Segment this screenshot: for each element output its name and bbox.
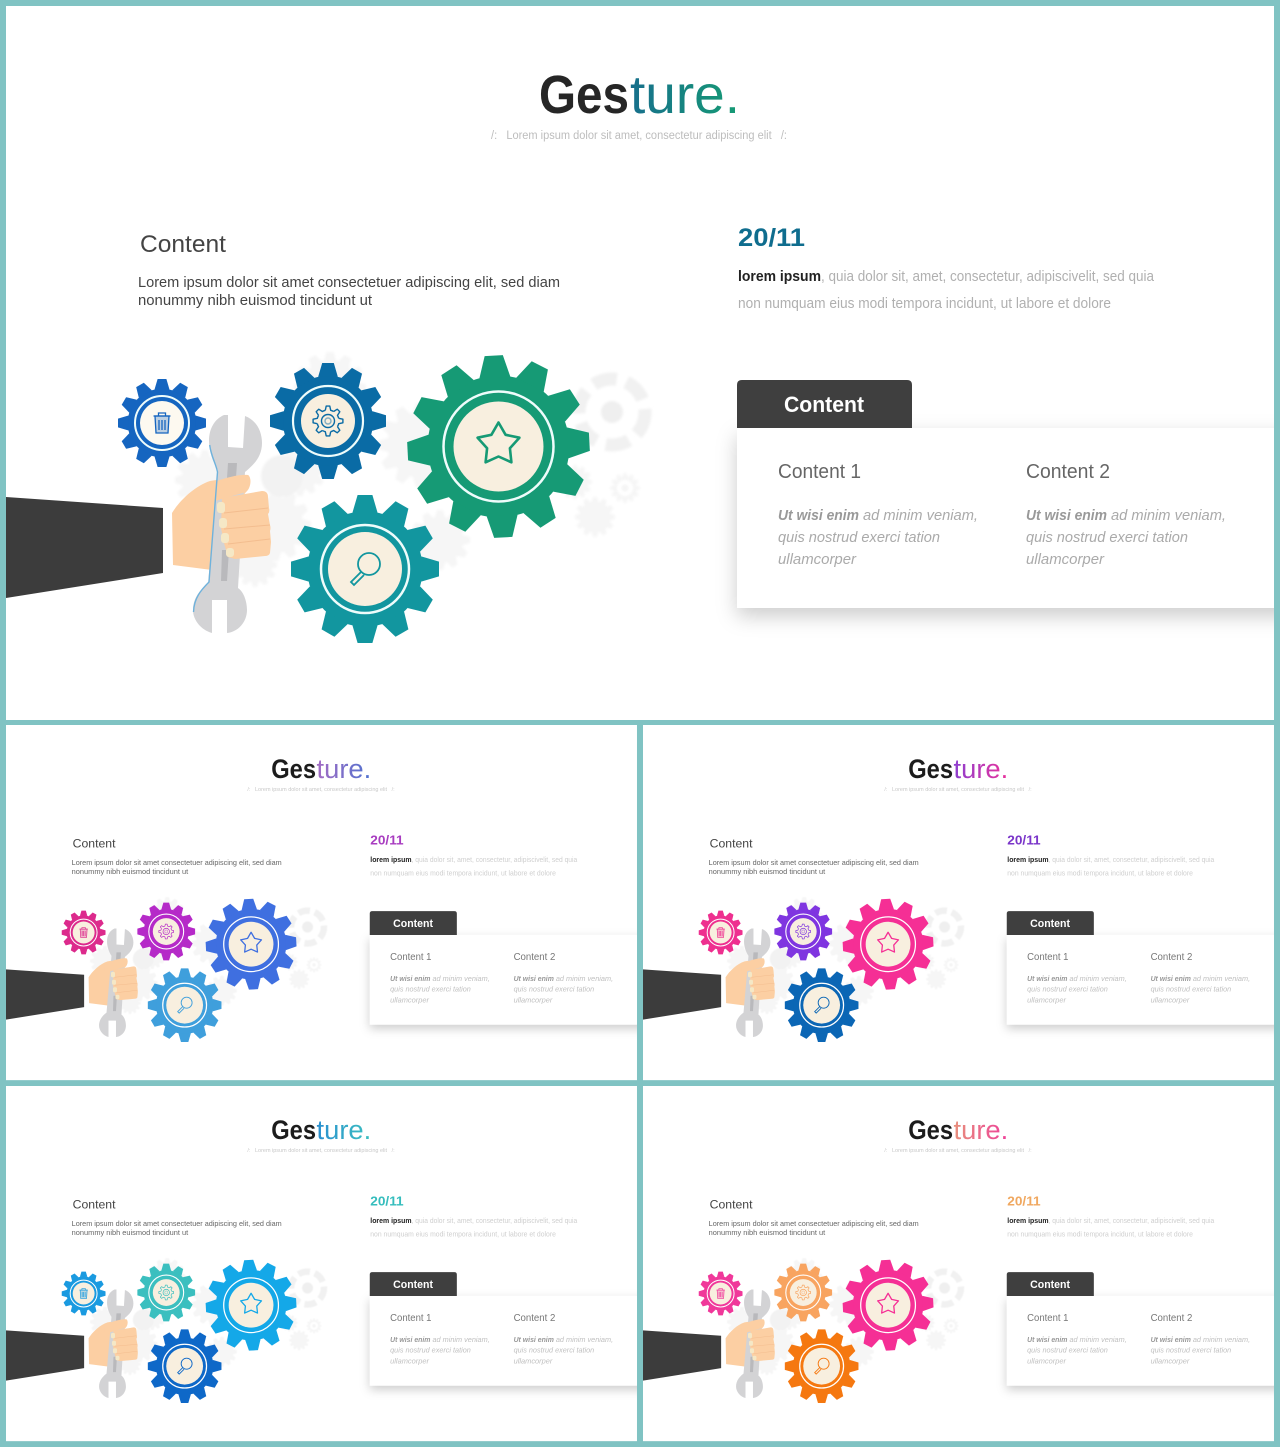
hand holding wrench: [6, 929, 138, 1037]
column 1: ullamcorper: [390, 1357, 429, 1366]
tab: Content: [1030, 918, 1070, 930]
column 2: ad minim veniam,: [556, 1335, 613, 1344]
tab: [370, 911, 457, 935]
background gears: [175, 352, 645, 587]
panel: small pink slide: [643, 725, 1280, 1080]
column 2: Content 2: [1026, 461, 1110, 483]
right text block: lorem ipsum: [738, 269, 821, 285]
column 2: quis nostrud exerci tation: [1151, 1346, 1231, 1355]
left text block: Lorem ipsum dolor sit amet consectetuer adipiscing elit, sed diam: [709, 1219, 919, 1228]
column 1: ullamcorper: [390, 996, 429, 1005]
column 2: ullamcorper: [1151, 996, 1190, 1005]
column 2: Ut wisi enim: [1151, 1335, 1191, 1344]
right text block: [370, 1216, 577, 1238]
right text block: , quia dolor sit, amet, consectetur, adipiscivelit, sed quia: [412, 1216, 577, 1225]
gear: magnifier icon: [785, 1329, 858, 1403]
right text block: non numquam eius modi tempora incidunt, ut labore et dolore: [370, 1229, 556, 1238]
title: [908, 1115, 1008, 1145]
left text block: Lorem ipsum dolor sit amet consectetuer adipiscing elit, sed diam: [72, 1219, 282, 1228]
column 1: [1027, 952, 1127, 1005]
title: [540, 75, 735, 114]
column 2: [514, 952, 613, 1005]
column 2: quis nostrud exerci tation: [1026, 529, 1188, 546]
gear: star icon: [403, 351, 594, 542]
gear: trash icon: [118, 379, 206, 467]
title: [271, 1115, 371, 1145]
date: 20/11: [370, 833, 404, 847]
column 2: Content 2: [1151, 952, 1193, 963]
column 2: Ut wisi enim: [1151, 974, 1191, 983]
gear: magnifier icon: [148, 1329, 221, 1403]
column 2: ad minim veniam,: [556, 974, 613, 983]
subtitle: /: Lorem ipsum dolor sit amet, consectetur adipiscing elit /:: [247, 1148, 395, 1154]
column 2: ullamcorper: [1026, 551, 1105, 568]
gear: settings icon: [137, 1264, 195, 1321]
column 2: quis nostrud exerci tation: [514, 985, 594, 994]
column 1: ad minim veniam,: [863, 507, 978, 524]
right text block: [738, 269, 1155, 312]
gear: magnifier icon: [291, 495, 439, 643]
background gears: [90, 1258, 324, 1375]
left heading: Content: [710, 836, 753, 850]
gear: trash icon: [62, 911, 106, 954]
title: Ges: [908, 1115, 953, 1145]
right text block: , quia dolor sit, amet, consectetur, adipiscivelit, sed quia: [1049, 1216, 1214, 1225]
right text block: lorem ipsum: [370, 855, 412, 864]
tab: Content: [393, 918, 433, 930]
right text block: , quia dolor sit, amet, consectetur, adipiscivelit, sed quia: [821, 269, 1155, 285]
column 2: Ut wisi enim: [514, 974, 554, 983]
right text block: [1007, 855, 1214, 877]
column 1: ullamcorper: [1027, 996, 1066, 1005]
hand holding wrench: [643, 929, 775, 1037]
subtitle: /: Lorem ipsum dolor sit amet, consectetur adipiscing elit /:: [247, 787, 395, 793]
column 2: ad minim veniam,: [1111, 507, 1226, 524]
column 2: ullamcorper: [514, 996, 553, 1005]
left heading: Content: [73, 836, 116, 850]
panel: small blue slide: [6, 1086, 658, 1441]
left text block: nonummy nibh euismod tincidunt ut: [709, 867, 826, 876]
gear: star icon: [840, 897, 936, 992]
column 2: ullamcorper: [514, 1357, 553, 1366]
date: 20/11: [1007, 833, 1041, 847]
subtitle: /: Lorem ipsum dolor sit amet, consectetur adipiscing elit /:: [884, 1148, 1032, 1154]
column 1: Ut wisi enim: [778, 507, 859, 524]
column 2: [1026, 461, 1226, 568]
card: [370, 911, 658, 1025]
gear: settings icon: [774, 903, 832, 960]
column 1: Ut wisi enim: [390, 1335, 431, 1344]
left text block: [709, 860, 918, 876]
column 2: [514, 1313, 613, 1366]
column 1: ad minim veniam,: [432, 1335, 490, 1344]
card: [1007, 1272, 1280, 1386]
column 1: ad minim veniam,: [432, 974, 490, 983]
column 1: [1027, 1313, 1127, 1366]
background gears: [727, 1258, 961, 1375]
hand holding wrench: [6, 1290, 138, 1398]
date: 20/11: [370, 1194, 404, 1208]
date: 20/11: [738, 224, 805, 252]
left heading: Content: [140, 231, 226, 258]
column 1: Ut wisi enim: [1027, 974, 1068, 983]
tab: Content: [1030, 1279, 1070, 1291]
left text block: nonummy nibh euismod tincidunt ut: [72, 867, 189, 876]
right text block: [1007, 1216, 1214, 1238]
column 1: [390, 952, 490, 1005]
title: Ges: [908, 754, 953, 784]
column 1: Content 1: [390, 1313, 432, 1324]
left heading: Content: [710, 1197, 753, 1211]
title: [909, 759, 1006, 778]
left text block: nonummy nibh euismod tincidunt ut: [72, 1228, 189, 1237]
column 1: ad minim veniam,: [1069, 1335, 1127, 1344]
gear: magnifier icon: [148, 968, 221, 1042]
panel: small purple slide: [6, 725, 658, 1080]
gear: trash icon: [699, 911, 743, 954]
left text block: [72, 1219, 282, 1237]
background gears: [90, 897, 324, 1014]
left text block: [709, 1219, 919, 1237]
column 2: ad minim veniam,: [1193, 1335, 1250, 1344]
title: ture.: [630, 65, 740, 125]
column 2: Ut wisi enim: [514, 1335, 554, 1344]
tab: [370, 1272, 457, 1296]
gear: settings icon: [137, 903, 195, 960]
column 2: Content 2: [514, 1313, 556, 1324]
hand holding wrench: [643, 1290, 775, 1398]
gear: settings icon: [270, 363, 386, 479]
gear: magnifier icon: [785, 968, 858, 1042]
wrench edge highlight: [194, 445, 218, 612]
tab: Content: [784, 392, 865, 417]
gear: settings icon: [774, 1264, 832, 1321]
column 2: Ut wisi enim: [1026, 507, 1107, 524]
column 1: Content 1: [1027, 1313, 1069, 1324]
column 2: quis nostrud exerci tation: [514, 1346, 594, 1355]
left text block: [138, 274, 560, 309]
column 2: Content 2: [514, 952, 556, 963]
column 1: Content 1: [778, 461, 861, 483]
left text block: nonummy nibh euismod tincidunt ut: [709, 1228, 826, 1237]
gear: star icon: [203, 897, 299, 992]
left text block: Lorem ipsum dolor sit amet consectetuer adipiscing elit, sed diam: [138, 274, 560, 291]
column 1: Content 1: [1027, 952, 1069, 963]
column 1: [778, 461, 978, 568]
gear: trash icon: [699, 1272, 743, 1315]
title: ture.: [954, 754, 1008, 784]
title: [272, 759, 369, 778]
column 1: Content 1: [390, 952, 432, 963]
column 1: ad minim veniam,: [1069, 974, 1127, 983]
column 2: ullamcorper: [1151, 1357, 1190, 1366]
background gears: [727, 897, 961, 1014]
left text block: Lorem ipsum dolor sit amet consectetuer adipiscing elit, sed diam: [72, 858, 282, 867]
right text block: [370, 855, 577, 877]
tab: [1007, 911, 1094, 935]
card: [1007, 911, 1280, 1025]
right text block: , quia dolor sit, amet, consectetur, adipiscivelit, sed quia: [1049, 855, 1214, 864]
title: Ges: [271, 1115, 316, 1145]
panel: small orange slide: [643, 1086, 1280, 1441]
gear: trash icon: [62, 1272, 106, 1315]
column 1: Ut wisi enim: [1027, 1335, 1068, 1344]
column 1: quis nostrud exerci tation: [390, 1346, 471, 1355]
title: ture.: [317, 754, 371, 784]
left heading: Content: [73, 1197, 116, 1211]
right text block: , quia dolor sit, amet, consectetur, adipiscivelit, sed quia: [412, 855, 577, 864]
tab: [1007, 1272, 1094, 1296]
gear: star icon: [203, 1258, 299, 1353]
title: Ges: [539, 65, 629, 125]
column 1: Ut wisi enim: [390, 974, 431, 983]
subtitle: /: Lorem ipsum dolor sit amet, consectetur adipiscing elit /:: [884, 787, 1032, 793]
gear: star icon: [840, 1258, 936, 1353]
column 1: [390, 1313, 490, 1366]
column 2: quis nostrud exerci tation: [1151, 985, 1231, 994]
column 1: quis nostrud exerci tation: [778, 529, 940, 546]
date: 20/11: [1007, 1194, 1041, 1208]
right text block: non numquam eius modi tempora incidunt, ut labore et dolore: [370, 868, 556, 877]
title: ture.: [954, 1115, 1008, 1145]
column 2: [1151, 1313, 1250, 1366]
column 1: ullamcorper: [1027, 1357, 1066, 1366]
right text block: lorem ipsum: [370, 1216, 412, 1225]
panel: large green slide: [6, 6, 1280, 720]
right text block: lorem ipsum: [1007, 855, 1049, 864]
column 2: ad minim veniam,: [1193, 974, 1250, 983]
right text block: non numquam eius modi tempora incidunt, ut labore et dolore: [1007, 1229, 1193, 1238]
tab: Content: [393, 1279, 433, 1291]
column 1: quis nostrud exerci tation: [1027, 985, 1108, 994]
right text block: lorem ipsum: [1007, 1216, 1049, 1225]
title: Ges: [271, 754, 316, 784]
column 1: ullamcorper: [778, 551, 857, 568]
column 2: [1151, 952, 1250, 1005]
title: ture.: [317, 1115, 371, 1145]
card: [370, 1272, 658, 1386]
left text block: [72, 860, 282, 876]
right text block: non numquam eius modi tempora incidunt, ut labore et dolore: [1007, 868, 1193, 877]
card: [737, 380, 1280, 608]
tab: [737, 380, 912, 428]
column 1: quis nostrud exerci tation: [390, 985, 471, 994]
right text block: non numquam eius modi tempora incidunt, ut labore et dolore: [738, 296, 1111, 312]
column 1: quis nostrud exerci tation: [1027, 1346, 1108, 1355]
left text block: nonummy nibh euismod tincidunt ut: [138, 292, 373, 309]
subtitle: /: Lorem ipsum dolor sit amet, consectetur adipiscing elit /:: [491, 130, 787, 142]
left text block: Lorem ipsum dolor sit amet consectetuer adipiscing elit, sed diam: [709, 858, 919, 867]
column 2: Content 2: [1151, 1313, 1193, 1324]
hand holding wrench: [6, 415, 271, 633]
